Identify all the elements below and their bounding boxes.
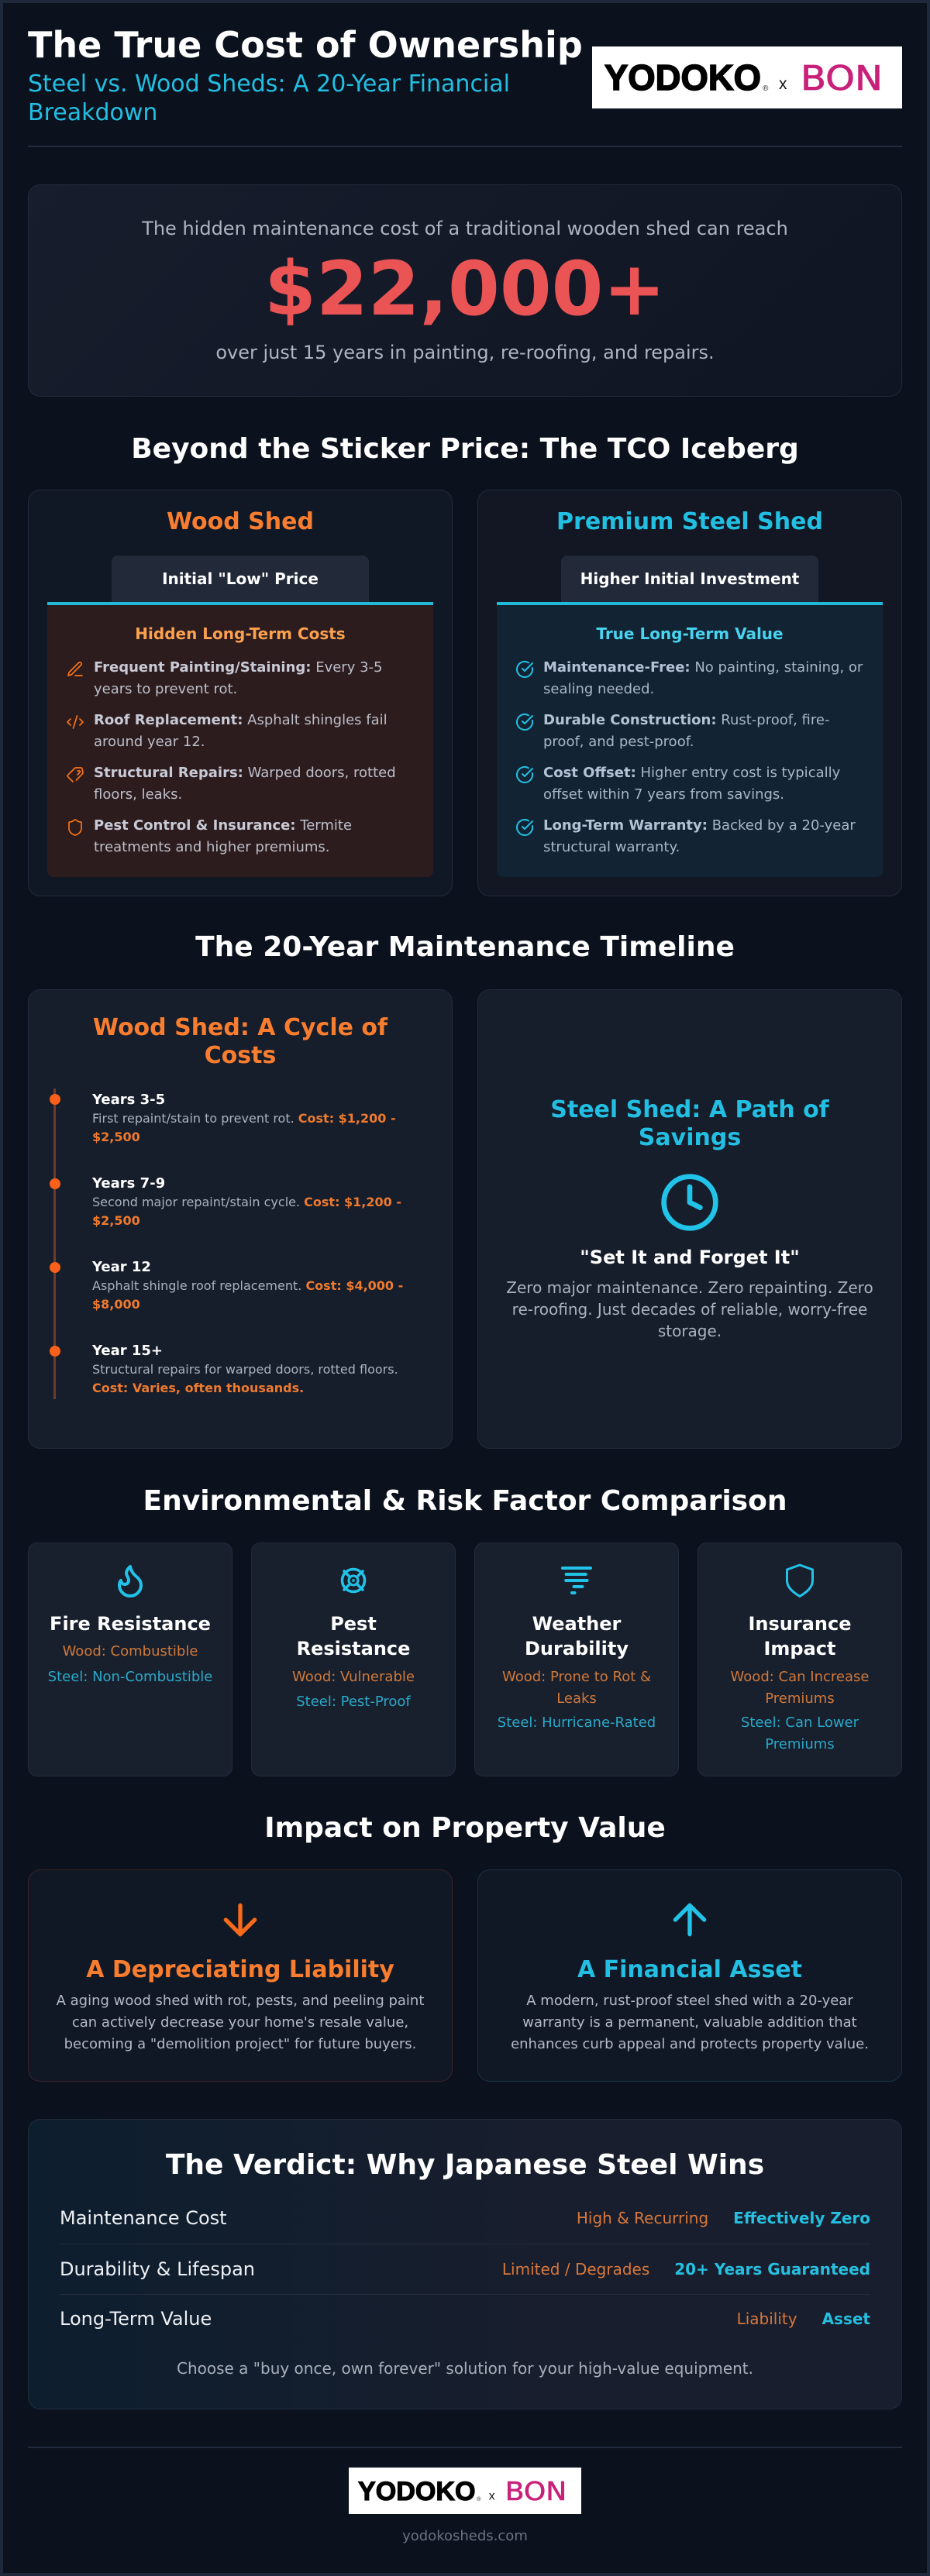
steel shed title: Premium Steel Shed	[556, 508, 823, 535]
steel initial investment tab	[561, 555, 818, 602]
panel: hero hidden cost	[28, 184, 902, 397]
hero intro text: The hidden maintenance cost of a traditional wooden shed can reach	[142, 218, 788, 239]
icon: check circle	[516, 660, 533, 678]
insurance title: Impact	[763, 1638, 835, 1659]
timeline axis	[53, 1089, 56, 1399]
insurance title: Insurance	[748, 1613, 851, 1635]
footer URL: yodokosheds.com	[402, 2528, 528, 2544]
warranty text: structural warranty.	[543, 839, 680, 855]
event detail: First repaint/stain to prevent rot. Cost: $1,200 -	[92, 1111, 396, 1126]
icon: arrow down	[215, 1895, 265, 1945]
panel: financial asset	[477, 1869, 902, 2082]
event detail: $8,000	[92, 1297, 140, 1312]
verdict title: The Verdict: Why Japanese Steel Wins	[166, 2149, 764, 2181]
liability description: can actively decrease your home's resale value,	[72, 2014, 408, 2031]
maintenance-free text: Maintenance-Free: No painting, staining, or	[543, 659, 863, 676]
painting text: years to prevent rot.	[94, 681, 237, 697]
icon: pen	[67, 662, 83, 676]
panel: steel timeline	[477, 989, 902, 1449]
year label: Years 7-9	[92, 1175, 165, 1192]
roof text: around year 12.	[94, 734, 205, 750]
weather steel rating: Steel: Hurricane-Rated	[498, 1714, 656, 1731]
row: durability	[60, 2254, 870, 2285]
pest title: Resistance	[297, 1638, 410, 1659]
icon: arrow up	[665, 1895, 715, 1945]
row label: Durability & Lifespan	[60, 2258, 255, 2280]
event: years 3-5	[91, 1092, 396, 1144]
value item: warranty	[516, 817, 856, 855]
subtitle: Breakdown	[28, 99, 157, 126]
event detail	[92, 1278, 403, 1312]
warranty text: Long-Term Warranty: Backed by a 20-year	[543, 817, 856, 834]
logo: Yodoko x Bon: YODOKO	[604, 57, 761, 98]
structural text: Structural Repairs: Warped doors, rotted	[94, 765, 396, 781]
steel slogan: "Set It and Forget It"	[580, 1247, 800, 1268]
weather title: Weather	[532, 1613, 621, 1635]
event detail: Structural repairs for warped doors, rotted floors.	[92, 1362, 398, 1377]
event detail: Asphalt shingle roof replacement. Cost: $4,000 -	[92, 1278, 403, 1293]
icon: clock	[661, 1174, 718, 1231]
subtitle	[28, 71, 510, 126]
event detail	[92, 1195, 401, 1228]
fire steel rating: Steel: Non-Combustible	[48, 1669, 212, 1685]
liability description: becoming a "demolition project" for future buyers.	[64, 2036, 416, 2052]
insurance wood rating	[698, 1666, 902, 1710]
event detail	[92, 1362, 398, 1395]
row values: 20+ Years Guaranteed	[674, 2260, 870, 2279]
heading: environmental comparison: Environmental & Risk Factor Comparison	[143, 1485, 787, 1517]
heading: maintenance timeline: The 20-Year Maintenance Timeline	[195, 931, 735, 963]
wood initial price tab	[112, 555, 369, 602]
liability description	[28, 1990, 453, 2055]
insurance wood rating: Wood: Can Increase	[731, 1669, 869, 1685]
asset description: A modern, rust-proof steel shed with a 20-year	[526, 1993, 853, 2009]
cost item: pest control	[68, 817, 352, 855]
logo: Yodoko x Bon	[592, 46, 902, 108]
cost item: roof	[67, 712, 388, 750]
insurance steel rating	[698, 1712, 902, 1756]
row values: Limited / Degrades	[502, 2260, 649, 2279]
weather title	[474, 1611, 679, 1661]
steel description: Zero major maintenance. Zero repainting. Zero	[506, 1278, 873, 1297]
pest wood rating: Wood: Vulnerable	[292, 1669, 415, 1685]
pest title	[251, 1611, 456, 1661]
title: The True Cost of Ownership	[28, 24, 583, 66]
icon: insurance shield	[781, 1562, 818, 1599]
roof text	[94, 712, 388, 750]
heading: TCO iceberg: Beyond the Sticker Price: The TCO Iceberg	[131, 433, 799, 465]
maintenance-free text: sealing needed.	[543, 681, 654, 697]
icon: shield	[68, 819, 82, 836]
hero big number: $22,000+	[264, 246, 666, 332]
pest control text: treatments and higher premiums.	[94, 839, 330, 855]
event: years 7-9	[91, 1175, 401, 1228]
asset description: enhances curb appeal and protects property value.	[511, 2036, 869, 2052]
row values: Asset	[822, 2309, 870, 2328]
event: year 12	[91, 1259, 403, 1312]
card: fire resistance	[28, 1543, 232, 1776]
footer logo: BON	[505, 2476, 567, 2506]
marker: year 12	[50, 1262, 60, 1273]
insurance steel rating: Steel: Can Lower	[741, 1714, 859, 1731]
durable text: proof, and pest-proof.	[543, 734, 694, 750]
event detail	[92, 1111, 396, 1144]
icon: pest target	[341, 1568, 366, 1593]
painting text	[94, 659, 382, 697]
card: pest resistance	[251, 1543, 456, 1776]
insurance wood rating: Premiums	[765, 1690, 835, 1707]
row values: High & Recurring	[577, 2209, 708, 2227]
value item: cost offset	[516, 765, 840, 803]
logo: Yodoko x Bon: x	[779, 75, 787, 93]
long-term value box	[497, 602, 883, 877]
warranty text	[543, 817, 856, 855]
event detail: $2,500	[92, 1213, 140, 1228]
panel: depreciating liability	[28, 1869, 453, 2082]
footer logo: ®	[477, 2495, 481, 2502]
footer logo: YODOKO	[358, 2477, 476, 2506]
liability title: A Depreciating Liability	[86, 1956, 394, 1983]
cost item: structural	[67, 765, 396, 803]
row: long-term value	[60, 2303, 870, 2334]
icon: code brackets	[67, 715, 84, 729]
steel description: storage.	[658, 1322, 722, 1340]
row label: Maintenance Cost	[60, 2207, 227, 2229]
row label: Long-Term Value	[60, 2308, 212, 2330]
pest control text: Pest Control & Insurance: Termite	[94, 817, 352, 834]
row values	[577, 2209, 870, 2227]
year label: Years 3-5	[92, 1092, 165, 1108]
value item: maintenance-free	[516, 659, 863, 697]
row values	[737, 2309, 870, 2328]
year label: Year 15+	[92, 1343, 163, 1359]
weather title: Durability	[525, 1638, 629, 1659]
event detail: $2,500	[92, 1130, 140, 1144]
logo: Yodoko x Bon: BON	[801, 59, 883, 98]
year label: Year 12	[92, 1259, 151, 1275]
footer logo: x	[489, 2489, 495, 2502]
pest title: Pest	[330, 1613, 377, 1635]
pest steel rating: Steel: Pest-Proof	[296, 1694, 411, 1710]
liability description: A aging wood shed with rot, pests, and peeling paint	[57, 1993, 424, 2009]
panel: wood shed TCO	[28, 490, 453, 896]
structural text: floors, leaks.	[94, 786, 182, 803]
long-term value heading: True Long-Term Value	[596, 624, 784, 643]
asset description: warranty is a permanent, valuable addition that	[522, 2014, 857, 2031]
marker: years 7-9	[50, 1178, 60, 1189]
insurance title	[698, 1611, 902, 1661]
icon: tornado	[558, 1562, 595, 1599]
hidden costs box	[47, 602, 433, 877]
event detail: Second major repaint/stain cycle. Cost: $1,200 -	[92, 1195, 401, 1209]
cost offset text: offset within 7 years from savings.	[543, 786, 784, 803]
subtitle: Steel vs. Wood Sheds: A 20-Year Financial	[28, 71, 510, 98]
panel: verdict	[28, 2119, 902, 2409]
weather wood rating: Leaks	[556, 1690, 597, 1707]
steel description: re-roofing. Just decades of reliable, worry-free	[512, 1300, 867, 1319]
row values: Liability	[737, 2309, 797, 2328]
maintenance-free text	[543, 659, 863, 697]
cost item: painting	[67, 659, 382, 697]
asset description	[477, 1990, 902, 2055]
asset title: A Financial Asset	[577, 1956, 802, 1983]
icon: check circle	[516, 818, 533, 836]
icon: flame	[118, 1565, 143, 1598]
steel timeline title	[550, 1096, 829, 1151]
hidden costs heading: Hidden Long-Term Costs	[135, 624, 346, 643]
wood timeline title: Wood Shed: A Cycle of	[93, 1014, 388, 1041]
steel timeline title: Savings	[639, 1124, 741, 1151]
cost offset text: Cost Offset: Higher entry cost is typically	[543, 765, 840, 781]
durable text	[543, 712, 829, 750]
panel: wood timeline	[28, 989, 453, 1449]
row values: Effectively Zero	[733, 2209, 870, 2227]
marker: years 3-5	[50, 1094, 60, 1105]
event detail: Cost: Varies, often thousands.	[92, 1381, 304, 1395]
logo: Yodoko x Bon: ®	[763, 84, 769, 93]
pest control text	[94, 817, 352, 855]
row values	[502, 2260, 870, 2279]
steel timeline title: Steel Shed: A Path of	[550, 1096, 829, 1123]
wood timeline title	[93, 1014, 388, 1069]
wood timeline title: Costs	[205, 1042, 276, 1069]
painting text: Frequent Painting/Staining: Every 3-5	[94, 659, 382, 676]
durable text: Durable Construction: Rust-proof, fire-	[543, 712, 829, 728]
roof text: Roof Replacement: Asphalt shingles fail	[94, 712, 388, 728]
icon: tag	[67, 767, 84, 782]
structural text	[94, 765, 396, 803]
weather wood rating	[474, 1666, 679, 1710]
marker: year 15+	[50, 1346, 60, 1357]
fire title: Fire Resistance	[50, 1613, 211, 1635]
value item: durable	[516, 712, 829, 750]
card: insurance impact	[698, 1543, 902, 1776]
wood shed title: Wood Shed	[167, 508, 314, 535]
weather wood rating: Wood: Prone to Rot &	[502, 1669, 651, 1685]
icon: check circle	[516, 765, 533, 783]
card: weather durability	[474, 1543, 679, 1776]
wood initial price tab: Initial "Low" Price	[162, 569, 319, 588]
event: year 15+	[91, 1343, 398, 1395]
hero closing text: over just 15 years in painting, re-roofing, and repairs.	[215, 342, 715, 363]
footer divider	[28, 2447, 902, 2448]
heading: property value: Impact on Property Value	[264, 1812, 666, 1844]
cost offset text	[543, 765, 840, 803]
steel initial investment tab: Higher Initial Investment	[580, 569, 799, 588]
verdict closing line: Choose a "buy once, own forever" solution for your high-value equipment.	[177, 2359, 753, 2378]
panel: steel shed TCO	[477, 490, 902, 896]
icon: check circle	[516, 713, 533, 731]
steel description	[506, 1278, 873, 1340]
header divider	[28, 146, 902, 147]
row: maintenance cost	[60, 2203, 870, 2234]
footer logo	[349, 2468, 581, 2514]
fire wood rating: Wood: Combustible	[63, 1643, 198, 1659]
insurance steel rating: Premiums	[765, 1736, 835, 1752]
